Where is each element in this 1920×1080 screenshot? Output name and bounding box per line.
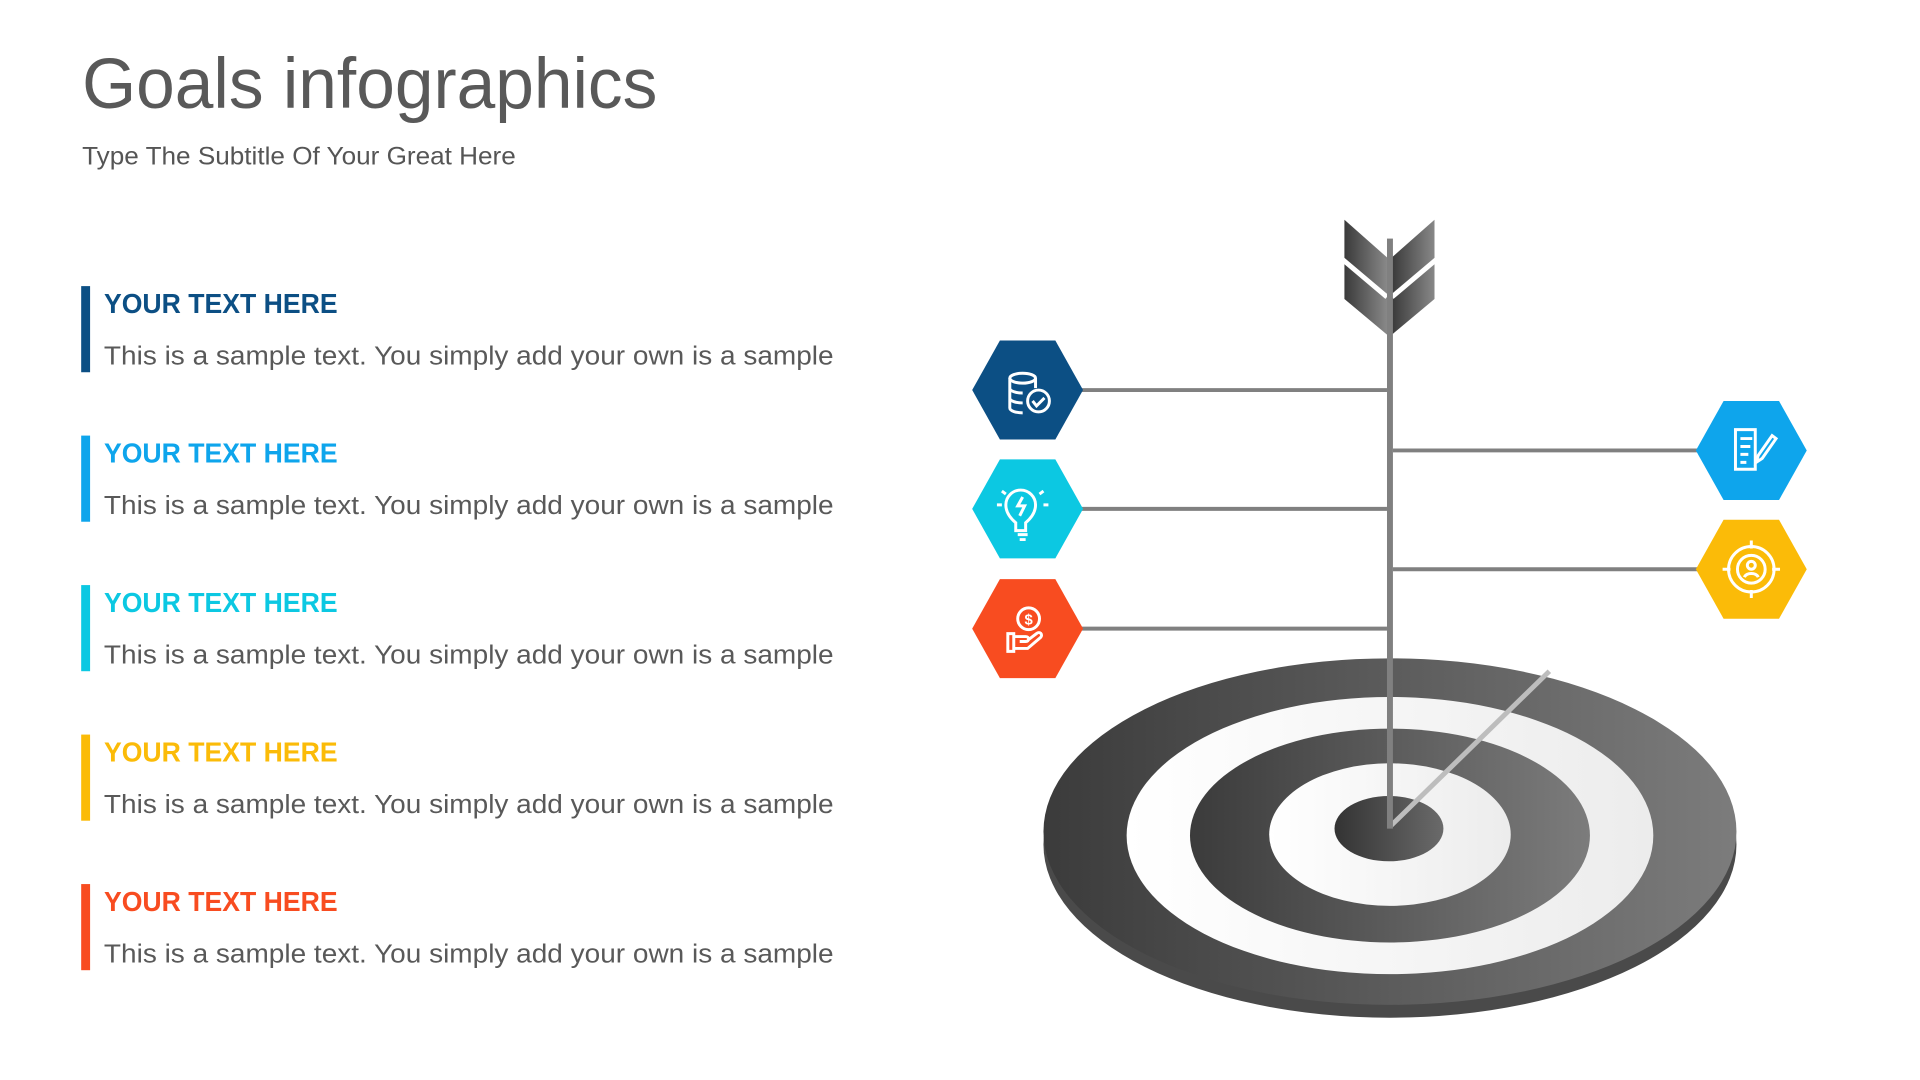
item 1: YOUR TEXT HERE — [104, 288, 338, 319]
item 2: This is a sample text. You simply add your own is a sample — [104, 492, 834, 520]
item 4: YOUR TEXT HERE — [104, 736, 338, 767]
item 5: This is a sample text. You simply add your own is a sample — [104, 940, 834, 968]
target board — [1043, 658, 1736, 1018]
subtitle: Type The Subtitle Of Your Great Here — [82, 143, 516, 170]
item 3: YOUR TEXT HERE — [104, 587, 338, 618]
title: Goals infographics — [82, 44, 657, 124]
hex icon: lightbulb — [972, 459, 1083, 558]
hex icon: document edit — [1696, 401, 1807, 500]
arrow fletching — [1342, 220, 1436, 335]
item 1 — [81, 286, 834, 372]
hex icon: money hand: $ — [1024, 613, 1033, 629]
item 3: This is a sample text. You simply add your own is a sample — [104, 641, 834, 669]
item 4: This is a sample text. You simply add your own is a sample — [104, 791, 834, 819]
hex icon: target person — [1696, 520, 1807, 619]
hex icon: database — [972, 341, 1083, 440]
item 2: YOUR TEXT HERE — [104, 437, 338, 468]
item 5: YOUR TEXT HERE — [104, 886, 338, 917]
arrow shaft — [1387, 239, 1393, 829]
arrow shadow line — [1390, 671, 1549, 827]
hex icon: money hand — [972, 579, 1083, 678]
item 5 — [81, 884, 834, 970]
item 2 — [81, 436, 834, 522]
item 4 — [81, 735, 834, 821]
item 3 — [81, 585, 834, 671]
connector lines — [1079, 390, 1699, 629]
item 1: This is a sample text. You simply add your own is a sample — [104, 342, 834, 370]
